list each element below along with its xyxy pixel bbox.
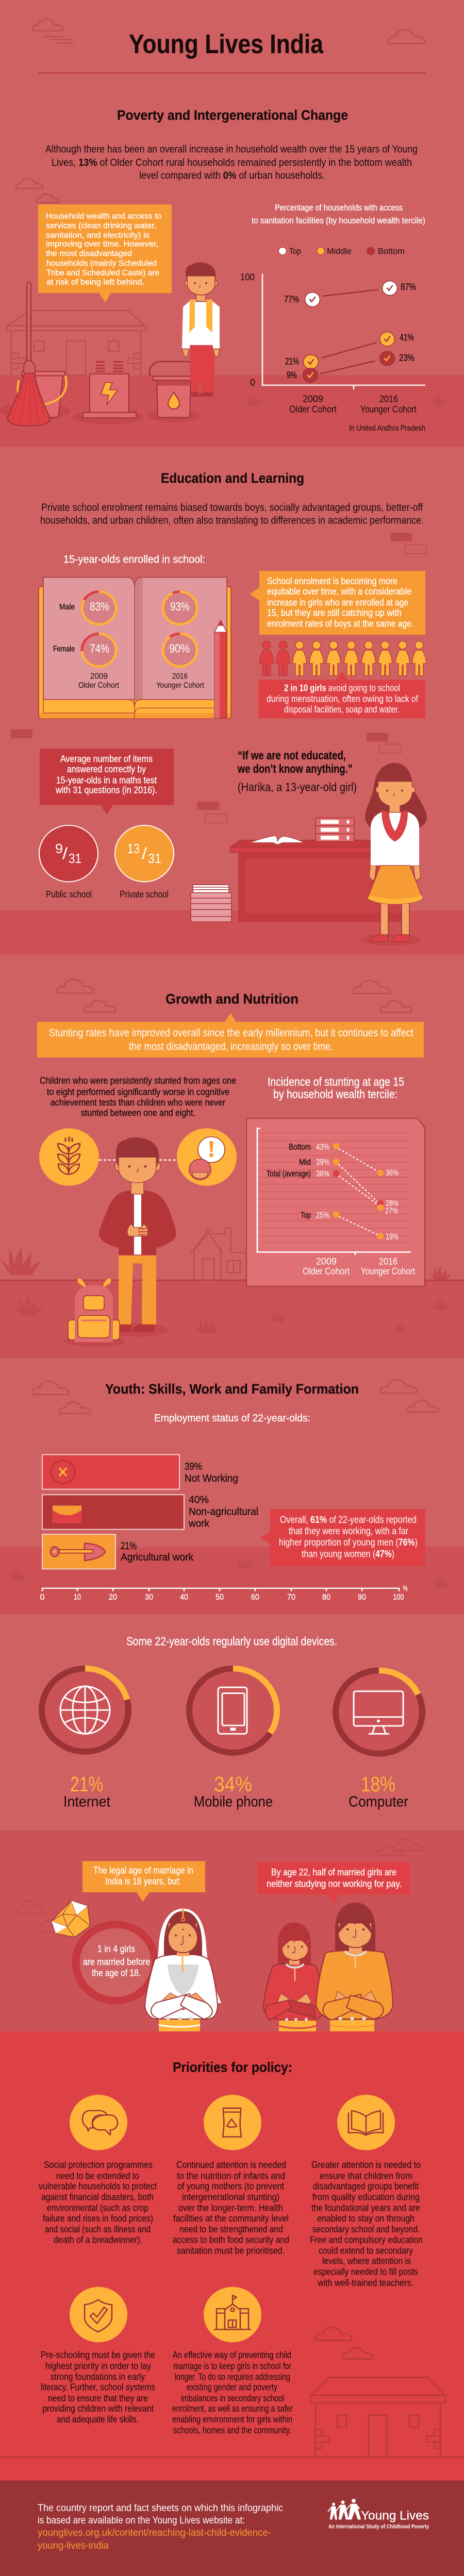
axis: percent scale: 60 — [251, 1593, 259, 1602]
text: cognitive achievement: to eight performed significantly worse in cognitive — [47, 1087, 229, 1098]
icon: computer — [354, 1691, 403, 1734]
stat: public school: Public school — [46, 889, 92, 900]
text: nutrition — [173, 2159, 289, 2256]
row and column labels: Older Cohort — [78, 681, 120, 690]
note: In United Andhra Pradesh — [349, 424, 425, 433]
icon: book — [337, 2095, 395, 2150]
legend — [278, 246, 405, 256]
chart panel: stunting incidence: 2016 — [379, 1256, 397, 1266]
donut: male 2009 — [82, 591, 116, 624]
text: nutrition: access to both food security and — [173, 2234, 289, 2245]
bar chart: employment status: Not Working — [185, 1473, 238, 1484]
callout: maths test: Average number of items — [60, 753, 153, 764]
callout: married girls — [257, 1862, 410, 1904]
text: nutrition: over the longer-term. Health — [178, 2202, 283, 2213]
text: pre-schooling: highest priority in order to lay — [45, 2361, 152, 2371]
heading: poverty: Poverty and Intergenerational Change — [117, 107, 348, 123]
illustration: ring with diamond — [52, 1901, 155, 2001]
icon: cognition circle — [177, 1128, 237, 1186]
decorative clouds: growth — [57, 980, 412, 1012]
chart title: stunting — [268, 1075, 404, 1100]
data labels: 9% — [287, 370, 297, 380]
text: social protection: need to be extended to — [56, 2171, 139, 2181]
stat: public school: 9 — [55, 841, 63, 856]
text: social protection — [39, 2159, 157, 2245]
illustration: ring with diamond: are married before — [83, 1956, 150, 1967]
section: priorities for policy — [0, 2059, 464, 2457]
stat: private school — [115, 825, 174, 900]
icon: open book — [250, 836, 305, 844]
row and column labels: Male — [59, 603, 75, 612]
callout: legal age of marriage: India is 18 years, but: — [105, 1876, 181, 1886]
subheading: enrolment: 15-year-olds enrolled in school: — [63, 553, 205, 566]
axis: percent scale: % — [403, 1585, 408, 1593]
row and column labels — [53, 603, 205, 690]
text: pre-schooling: Pre-schooling must be given the — [41, 2350, 155, 2360]
chart panel: stunting incidence: Total (average) — [267, 1169, 311, 1178]
donut: male 2016 — [163, 591, 197, 624]
bar chart: employment status: 21% — [121, 1540, 137, 1552]
text: education priority: ensure that children from — [320, 2171, 412, 2181]
illustration: boy with backpack — [64, 1138, 176, 1347]
axis: percent scale: 0 — [40, 1593, 45, 1602]
text: child marriage: schools, homes and the community. — [173, 2425, 291, 2435]
callout: household wealth: at risk of being left behind. — [46, 278, 144, 286]
subheading: digital devices: Some 22-year-olds regularly use digital devices. — [126, 1635, 337, 1648]
chart panel: stunting incidence: Bottom — [289, 1142, 311, 1151]
callout: enrolment equity: School enrolment is becoming more — [267, 575, 397, 586]
callout: menstruation: 2 in 10 girls avoid going to school — [284, 683, 400, 693]
icon: shovel — [51, 1543, 105, 1561]
quote: we don’t know anything.” — [237, 762, 353, 775]
chart panel: stunting incidence: Older Cohort — [303, 1266, 350, 1276]
stat: private school: 31 — [148, 851, 161, 866]
bar chart: employment status: 39% — [185, 1461, 202, 1472]
text: education priority — [310, 2159, 423, 2288]
text: social protection: and social (such as illness and — [45, 2224, 151, 2234]
data labels: 23% — [399, 352, 415, 363]
footer text: The country report and fact sheets on which this infographic — [38, 2502, 283, 2514]
text: child marriage: longer. To do so requires addressing — [175, 2371, 290, 2382]
stat: private school: 13 — [127, 841, 140, 856]
icon: not working — [51, 1461, 75, 1483]
intro text: education — [40, 502, 424, 527]
text: pre-schooling: literacy. Further, school systems — [41, 2382, 155, 2393]
axis labels: Older Cohort — [289, 404, 337, 414]
pictogram: 2 in 10 girls — [259, 641, 426, 676]
text: pre-schooling: need to ensure that they are — [48, 2393, 148, 2403]
priority: social protection — [39, 2095, 157, 2245]
text: child marriage: An effective way of preventing child — [173, 2350, 291, 2360]
footer text: young-lives-india — [38, 2540, 109, 2551]
bar chart: employment status: 40% — [189, 1494, 209, 1505]
text: cognitive achievement: achievement tests than children who were never — [51, 1097, 226, 1108]
callout: household wealth: improving over time. However, — [46, 240, 158, 248]
callout: legal age of marriage — [82, 1861, 205, 1902]
stats: digital use — [63, 1773, 408, 1810]
section: education and learning — [11, 470, 427, 945]
text: pre-schooling: strong foundations in early — [51, 2371, 145, 2382]
donut: female 2009 — [82, 634, 116, 666]
decorative bricks — [11, 533, 426, 823]
text: social protection: Social protection programmes — [44, 2159, 153, 2170]
legend: Middle — [327, 246, 352, 256]
stats: digital use: 18% — [361, 1773, 395, 1796]
callout: maths test: with 31 questions (in 2016). — [55, 785, 157, 795]
donut: computer — [336, 1670, 422, 1754]
text: cognitive achievement: Children who were persistently stunted from ages one — [40, 1076, 236, 1086]
axis labels: Younger Cohort — [360, 404, 417, 414]
line chart: sanitation access: 100 — [240, 272, 255, 282]
intro text: poverty: Lives, 13% of Older Cohort rural households remained persistently in the bottom wealth — [52, 157, 412, 168]
icon: shield — [70, 2287, 127, 2342]
text: cognitive achievement: stunted between one and eight. — [81, 1108, 195, 1118]
illustration: boy — [182, 262, 220, 397]
chart panel: stunting incidence: 28% — [386, 1198, 399, 1208]
chart title: stunting: by household wealth tercile: — [273, 1088, 397, 1100]
text: social protection: death of a breadwinner). — [54, 2234, 142, 2245]
illustration: bride — [144, 1909, 221, 2031]
callout: household wealth — [38, 205, 172, 302]
text: nutrition: to the nutrition of infants and — [177, 2171, 285, 2181]
logo: Young Lives: Young Lives — [361, 2509, 429, 2522]
text: pre-schooling — [41, 2350, 155, 2425]
text: education priority: from quality education during — [312, 2192, 420, 2202]
text: education priority: enabled to stay on through — [317, 2213, 415, 2224]
icon: wheat circle — [39, 1128, 99, 1186]
axis: percent scale: 40 — [180, 1593, 188, 1602]
axis: percent scale: 10 — [74, 1593, 81, 1602]
axis: percent scale — [40, 1585, 408, 1602]
illustration: ring with diamond: the age of 18. — [92, 1968, 141, 1978]
callout: legal age of marriage: The legal age of marriage in — [93, 1865, 193, 1875]
stats: digital use: Internet — [63, 1793, 110, 1810]
chart panel: stunting incidence: 36% — [316, 1169, 329, 1178]
axis labels — [289, 394, 417, 414]
illustration: older woman — [316, 1903, 393, 2031]
callout: stunting rates — [37, 1013, 424, 1058]
text: social protection: failure and rises in food prices) — [43, 2213, 153, 2224]
intro text: poverty — [45, 143, 418, 181]
priority: education — [310, 2095, 423, 2288]
title: Young Lives India — [129, 29, 323, 59]
axis labels: 2009 — [303, 394, 323, 404]
icon: bag — [52, 1498, 82, 1524]
row and column labels: 2016 — [172, 672, 188, 681]
icon: binders — [316, 818, 354, 842]
donut: internet — [42, 1669, 128, 1752]
donut: mobile phone — [189, 1669, 277, 1753]
text: social protection: vulnerable households to protect — [39, 2181, 157, 2191]
heading: education: Education and Learning — [161, 470, 304, 486]
decorative clouds: marriage — [17, 1839, 423, 1932]
priority: nutrition — [173, 2095, 289, 2256]
text: child marriage — [172, 2350, 293, 2435]
illustration: book with enrolment donuts — [39, 578, 231, 718]
icon: bucket with handle — [18, 371, 67, 417]
subheading: employment: Employment status of 22-year-olds: — [154, 1412, 310, 1424]
icon: stack of books — [191, 885, 231, 922]
chart panel: stunting incidence: 43% — [316, 1142, 329, 1151]
section: growth and nutrition — [0, 980, 464, 1347]
callout: maths test — [40, 749, 174, 815]
data labels: 21% — [285, 356, 299, 366]
chart panel: stunting incidence: 27% — [385, 1206, 398, 1215]
bar chart: employment status: Agricultural work — [121, 1551, 194, 1563]
stat: public school: 31 — [69, 851, 81, 866]
callout: household wealth: Household wealth and access to — [46, 212, 161, 221]
chart title: sanitation: to sanitation facilities (by household wealth tercile) — [252, 216, 425, 225]
decorative clouds: header — [16, 19, 424, 202]
text: child marriage: enrolment, as well as ensuring a safer — [172, 2403, 293, 2414]
callout: household wealth: Tribe and Scheduled Caste) are — [46, 268, 159, 277]
data labels: 41% — [400, 332, 414, 343]
bar chart: employment status: work — [188, 1518, 210, 1530]
text: child marriage: existing gender and poverty — [187, 2382, 278, 2393]
row and column labels: Younger Cohort — [156, 681, 205, 690]
donut: female 2009: 74% — [90, 642, 109, 655]
callout: maths test: answered correctly by — [67, 764, 146, 774]
callout: enrolment equity: equitable over time, with a considerable — [267, 586, 411, 597]
stat: public school: / — [62, 844, 68, 862]
section: youth — [8, 1380, 453, 2031]
chart title: sanitation — [252, 203, 425, 225]
axis: percent scale: 70 — [287, 1593, 295, 1602]
text: education priority: Free and compulsory education — [310, 2234, 423, 2245]
chart panel: stunting incidence — [246, 1118, 425, 1286]
icon: phone — [218, 1687, 247, 1734]
text: nutrition: intergenerational stunting) — [182, 2192, 279, 2202]
text: nutrition: need to be strengthened and — [179, 2224, 283, 2234]
callout: household wealth: services (clean drinking water, — [46, 221, 156, 230]
callout: overall working — [260, 1509, 425, 1566]
priority: pre-schooling — [41, 2287, 155, 2425]
text: pre-schooling: and adequate life skills. — [57, 2414, 139, 2425]
illustration: ring with diamond: 1 in 4 girls — [97, 1944, 135, 1954]
callout: household wealth: the most disadvantaged — [46, 249, 132, 258]
icon: water bucket — [150, 362, 198, 417]
footer text — [38, 2502, 283, 2551]
footer text: younglives.org.uk/content/reaching-last-child-evidence- — [38, 2528, 271, 2538]
chart panel: stunting incidence: 19% — [386, 1232, 399, 1241]
stat: public school — [39, 825, 98, 900]
decorative clouds: youth — [32, 1380, 439, 1413]
dashed connectors — [99, 1159, 177, 1161]
callout: stunting rates: the most disadvantaged, increasingly so over time. — [129, 1040, 333, 1053]
text: child marriage: enabling environment for girls within — [172, 2414, 292, 2425]
chart panel: stunting incidence: Mid — [299, 1157, 311, 1167]
callout: household wealth: households (mainly Scheduled — [46, 259, 157, 268]
icon: electricity box — [83, 362, 136, 418]
data labels: 77% — [284, 294, 299, 304]
section: poverty and intergenerational change — [0, 107, 448, 433]
text: social protection: against financial disasters, both — [41, 2192, 154, 2202]
callout: overall working: Overall, 61% of 22-year-olds reported — [280, 1514, 417, 1526]
axis labels: 2016 — [379, 394, 398, 404]
bar chart: employment status — [40, 1454, 408, 1602]
axis: percent scale: 20 — [109, 1593, 117, 1602]
line chart: sanitation access: 0 — [250, 377, 255, 388]
decorative cloud and house — [0, 2327, 464, 2457]
grass — [8, 1556, 453, 1588]
logo: Young Lives: An International Study of Childhood Poverty — [328, 2524, 429, 2530]
chart panel: stunting incidence: 39% — [316, 1157, 329, 1167]
text: nutrition: Continued attention is needed — [176, 2159, 286, 2170]
intro text: poverty: level compared with 0% of urban households. — [139, 170, 325, 181]
priority: child marriage — [172, 2287, 293, 2435]
axis: percent scale: 50 — [216, 1593, 224, 1602]
grass — [244, 393, 448, 406]
line chart: sanitation access — [240, 272, 425, 433]
quote — [237, 749, 357, 794]
text: social protection: environmental (such as crop — [47, 2202, 148, 2213]
heading: priorities: Priorities for policy: — [173, 2059, 292, 2075]
chart panel: stunting incidence: Younger Cohort — [361, 1266, 416, 1276]
text: education priority: disadvantaged groups benefit — [313, 2181, 419, 2191]
legend: Bottom — [378, 246, 405, 256]
callout: menstruation — [258, 671, 425, 718]
quote: (Harika, a 13-year-old girl) — [238, 781, 357, 794]
callout: married girls: By age 22, half of married girls are — [271, 1867, 396, 1877]
chart panel: stunting incidence: Top — [301, 1210, 311, 1220]
text: education priority: the foundational years and are — [311, 2202, 420, 2213]
stats: digital use: 34% — [214, 1773, 252, 1796]
icon: food packet — [204, 2095, 261, 2150]
data labels: 87% — [401, 281, 416, 292]
callout: menstruation: during menstruation, often owing to lack of — [267, 693, 419, 704]
axis: percent scale: 30 — [145, 1593, 153, 1602]
chart panel: stunting incidence: 25% — [316, 1210, 329, 1220]
text: nutrition: of young mothers (to prevent — [177, 2181, 285, 2191]
axis: percent scale: 100 — [393, 1593, 404, 1602]
illustration: house outline — [7, 311, 146, 375]
chart title: stunting: Incidence of stunting at age 15 — [268, 1075, 404, 1088]
donut: male 2016: 93% — [170, 600, 190, 613]
donut: female 2016: 90% — [169, 642, 190, 655]
quote: “If we are not educated, — [238, 749, 346, 762]
legend: Top — [289, 246, 301, 256]
donut: female 2016 — [163, 634, 197, 666]
text: education priority: secondary school and beyond. — [312, 2224, 420, 2234]
grass and house background — [0, 1228, 464, 1333]
callout: overall working: than young women (47%) — [302, 1549, 394, 1560]
chart panel: stunting incidence: 2009 — [316, 1256, 337, 1266]
callout: overall working: that they were working, with a far — [289, 1526, 408, 1537]
icon: speech bubbles — [70, 2095, 127, 2150]
callout: enrolment equity — [250, 571, 425, 635]
chart panel: stunting incidence: 36% — [386, 1168, 399, 1177]
stats: digital use: Mobile phone — [194, 1793, 273, 1810]
axis: percent scale: 90 — [358, 1593, 366, 1602]
callout: maths test: 15-year-olds in a maths test — [56, 775, 157, 785]
illustration: desk — [230, 840, 401, 922]
text: nutrition: sanitation must be prioritised. — [177, 2245, 285, 2256]
stat: private school: Private school — [120, 889, 169, 900]
illustration: girl with books — [360, 763, 427, 945]
row and column labels: Female — [53, 645, 75, 654]
icon: backpack — [68, 1280, 120, 1342]
text: education priority: especially needed to fill posts — [313, 2266, 418, 2277]
text: nutrition: facilities at the community level — [173, 2213, 289, 2224]
illustration: shadows — [0, 402, 200, 425]
data labels — [284, 281, 416, 380]
icon: globe — [60, 1686, 110, 1734]
text: education priority: with well-trained teachers. — [317, 2277, 413, 2288]
stat: private school: / — [142, 844, 147, 862]
logo: Young Lives — [328, 2499, 429, 2530]
callout: enrolment equity: 15, but they are still catching up with — [267, 607, 402, 618]
callout: married girls: neither studying nor working for pay. — [267, 1878, 402, 1889]
text: child marriage: marriage is to keep girls in school for — [173, 2361, 291, 2371]
footer text: is based are available on the Young Lives website at: — [38, 2515, 245, 2526]
icon: school — [204, 2287, 261, 2342]
callout: enrolment equity: enrolment rates of boys at the same age. — [267, 618, 413, 629]
heading: youth: Youth: Skills, Work and Family Formation — [105, 1381, 359, 1397]
text: education priority: could extend to secondary — [319, 2245, 413, 2256]
icon: broom — [7, 282, 51, 426]
footer — [38, 2499, 429, 2551]
callout: overall working: higher proportion of young men (76%) — [279, 1537, 418, 1548]
callout: enrolment equity: increase in girls who are enrolled at age — [267, 597, 408, 607]
data points — [303, 281, 397, 382]
illustration: younger woman — [263, 1923, 326, 2031]
bar chart: employment status: Non-agricultural — [189, 1506, 258, 1518]
stats: digital use: 21% — [70, 1773, 103, 1796]
stats: digital use: Computer — [349, 1793, 408, 1810]
text: cognitive achievement — [40, 1076, 236, 1118]
text: pre-schooling: providing children with relevant — [42, 2403, 154, 2414]
chart title: sanitation: Percentage of households with access — [275, 203, 403, 212]
icon: pencil — [214, 620, 227, 718]
axis: percent scale: 80 — [322, 1593, 330, 1602]
text: education priority: Greater attention is needed to — [311, 2159, 421, 2170]
row and column labels: 2009 — [90, 672, 108, 681]
text: education priority: levels, where attention is — [322, 2256, 411, 2266]
callout: menstruation: disposal facilities, soap and water. — [284, 704, 400, 715]
callout: household wealth: sanitation, and electricity) is — [46, 231, 150, 240]
donut: male 2009: 83% — [90, 600, 109, 613]
text: child marriage: imbalances in secondary school — [181, 2393, 284, 2403]
heading: growth: Growth and Nutrition — [165, 991, 299, 1007]
